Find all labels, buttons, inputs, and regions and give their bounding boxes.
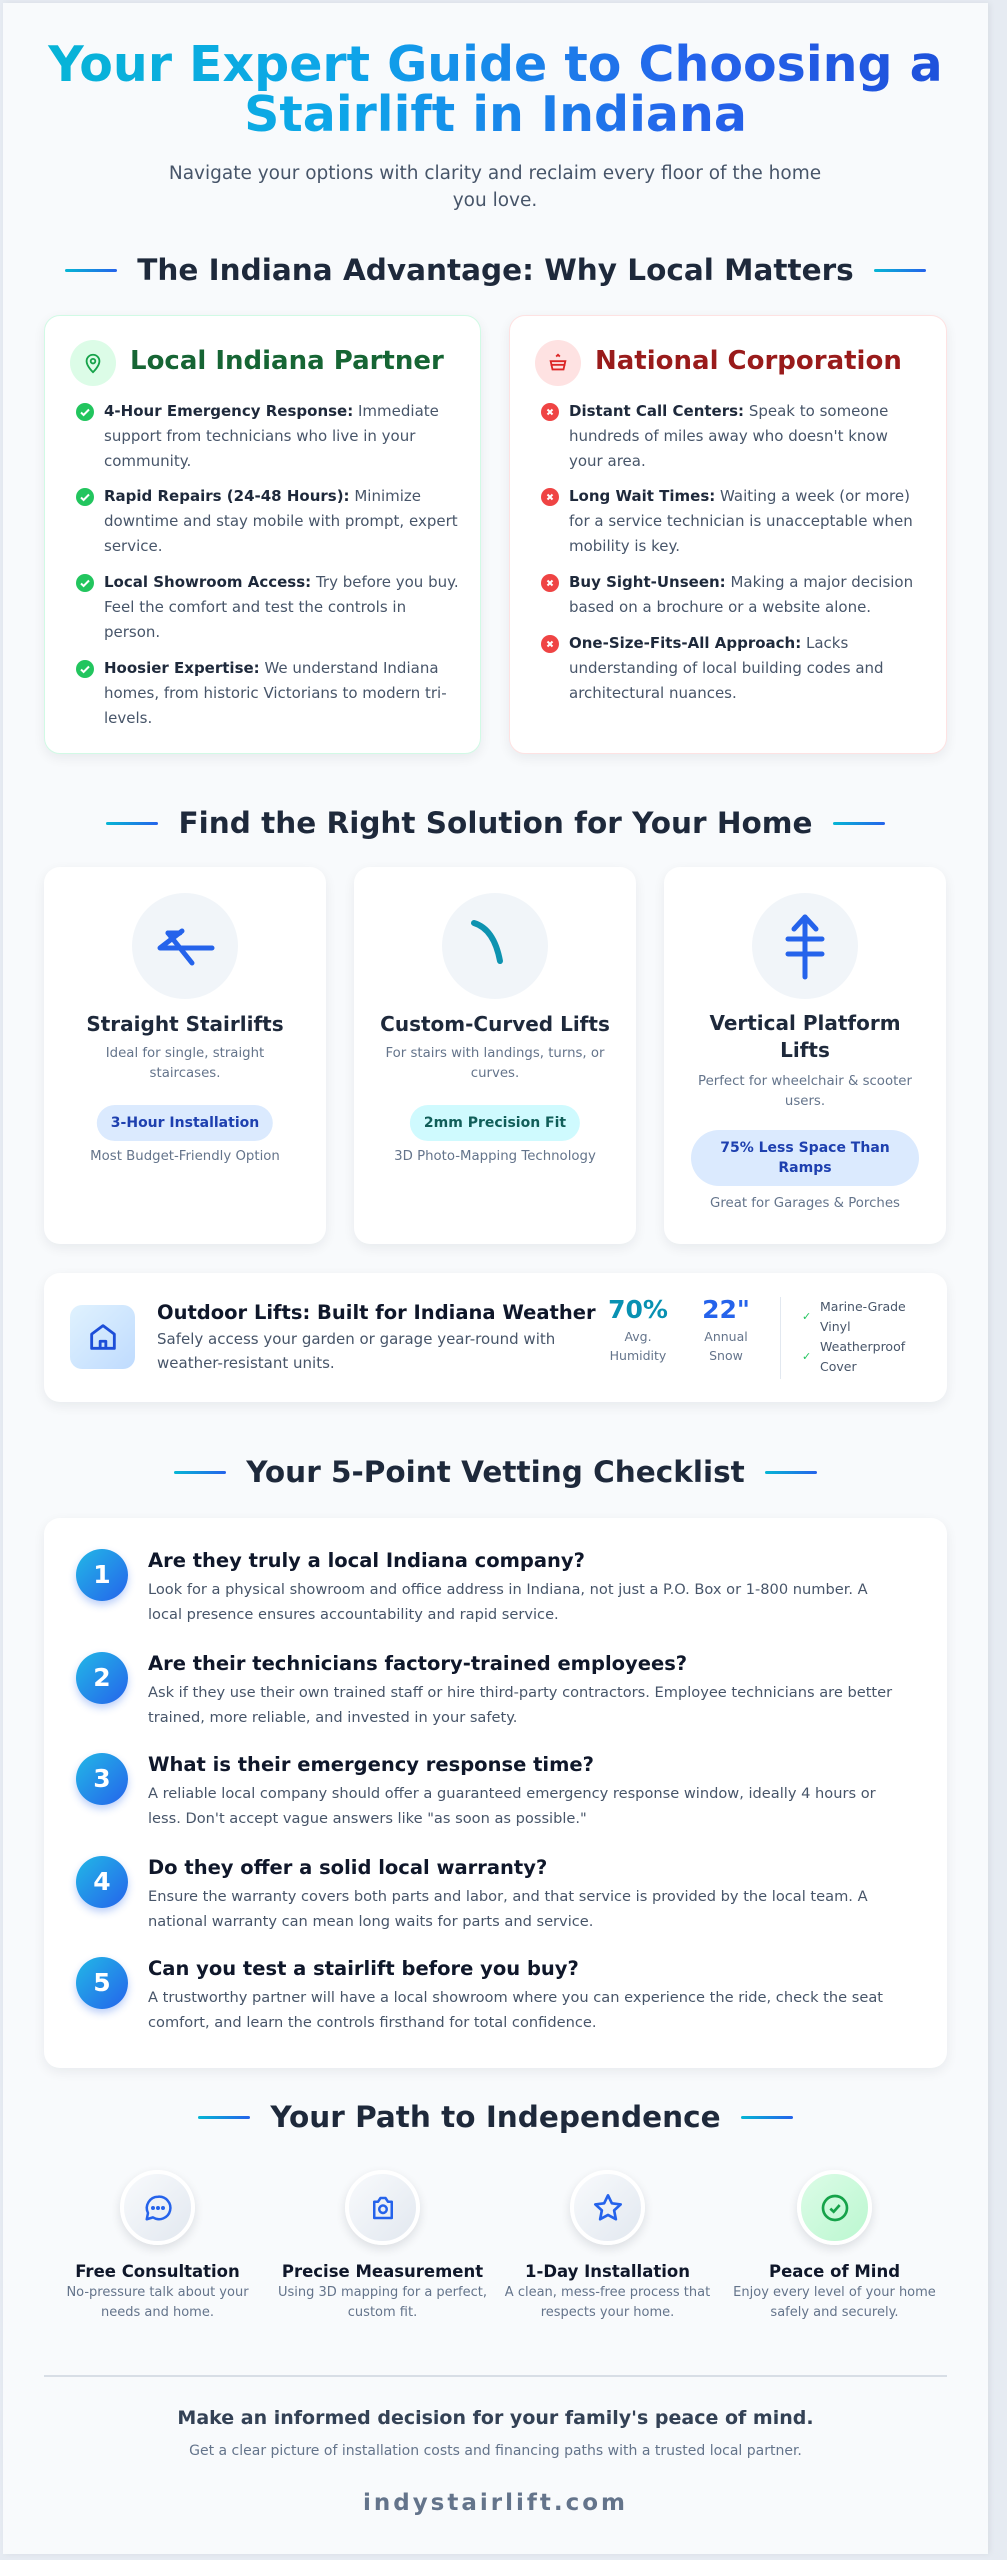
- step: peace of mind: [733, 2174, 936, 2320]
- text: Precise Measurement: [282, 2262, 483, 2281]
- panel: vertical platform: Great for Garages & Porches: [710, 1196, 900, 1211]
- text: Outdoor Lifts: Built for Indiana Weather: [157, 1301, 596, 1324]
- stat: snow: Annual: [704, 1329, 748, 1344]
- item: [76, 487, 458, 555]
- badge: 2mm Precision Fit: [424, 1115, 566, 1131]
- item: Long Wait Times: Waiting a week (or more) for a service technician is unacceptable when mobility is key.: [569, 487, 913, 555]
- item: Local Showroom Access: Try before you buy.: [104, 573, 459, 591]
- item: person.: [104, 623, 160, 641]
- title: Your Expert Guide to Choosing a: [48, 36, 943, 93]
- footer subtext: Get a clear picture of installation costs and financing paths with a trusted local partner.: [189, 2443, 802, 2459]
- panel: local partner: [44, 315, 481, 754]
- stat: snow: Snow: [709, 1348, 743, 1363]
- item: One-Size-Fits-All Approach: Lacks understanding of local building codes and architectural nuances.: [569, 634, 884, 702]
- panel: curved lifts: For stairs with landings, turns, or curves.: [386, 1046, 604, 1081]
- panel: vertical platform: Perfect for wheelchair & scooter users.: [698, 1074, 912, 1109]
- features list: [802, 1299, 906, 1374]
- panel: checklist: [44, 1518, 947, 2068]
- heading: path: Your Path to Independence: [270, 2100, 721, 2134]
- heading: checklist: Your 5-Point Vetting Checklist: [246, 1455, 745, 1489]
- item: Distant Call Centers: Speak to someone hundreds of miles away who doesn't know your area.: [569, 402, 888, 470]
- text: Using 3D mapping for a perfect, custom fit.: [278, 2285, 487, 2320]
- text: 1-Day Installation: [525, 2262, 690, 2281]
- badge: 3-Hour Installation: [111, 1115, 259, 1131]
- panel: national corporation: [509, 315, 947, 754]
- icon: vertical arrow: [752, 893, 858, 999]
- badge: [97, 1105, 273, 1141]
- stat: humidity: [608, 1295, 668, 1363]
- badge: [410, 1105, 580, 1141]
- panel: checklist: 5: [93, 1968, 111, 1997]
- step: installation: [504, 2177, 710, 2320]
- item: 4-Hour Emergency Response: Immediate: [104, 402, 439, 420]
- panel: checklist: Do they offer a solid local warranty?: [148, 1856, 547, 1879]
- icon: building: [535, 340, 581, 386]
- item 4: [72, 1856, 868, 1930]
- panel: vertical platform: [664, 867, 946, 1244]
- card title: National Corporation: [595, 346, 902, 376]
- item: downtime and stay mobile with prompt, expert: [104, 512, 458, 530]
- stat: snow: 22": [702, 1295, 750, 1324]
- panel: checklist: A trustworthy partner will have a local showroom where you can experience the ride, check the seat comfort, and learn the controls firsthand for total confidence.: [148, 1989, 883, 2031]
- item: Hoosier Expertise: We understand Indiana: [104, 659, 439, 677]
- text: A clean, mess-free process that respects your home.: [505, 2285, 710, 2320]
- stat: snow: [702, 1295, 750, 1363]
- text: Peace of Mind: [769, 2262, 900, 2281]
- item: homes, from historic Victorians to modern tri-: [104, 684, 447, 702]
- panel: straight stairlifts: Straight Stairlifts: [86, 1012, 284, 1036]
- panel: outdoor lifts: [44, 1273, 947, 1402]
- panel: straight stairlifts: Most Budget-Friendly Option: [90, 1149, 280, 1164]
- panel: checklist: Are they truly a local Indiana company?: [148, 1549, 585, 1572]
- features list: Marine-Grade: [820, 1299, 906, 1314]
- icon: camera: [345, 2170, 420, 2245]
- panel: straight stairlifts: [44, 867, 326, 1244]
- panel: curved lifts: Custom-Curved Lifts: [380, 1012, 610, 1036]
- panel: checklist: 3: [93, 1764, 111, 1793]
- panel: checklist: 4: [93, 1867, 111, 1896]
- item: Rapid Repairs (24-48 Hours): Minimize: [104, 487, 421, 505]
- item: Buy Sight-Unseen: Making a major decision based on a brochure or a website alone.: [569, 573, 913, 616]
- card title: Local Indiana Partner: [130, 346, 444, 376]
- panel: outdoor lifts: Safely access your garden or garage year-round with weather-resistant units.: [157, 1330, 555, 1372]
- item 1: [72, 1549, 868, 1623]
- features list: ✓: [802, 1350, 811, 1363]
- panel: checklist: Are their technicians factory-trained employees?: [148, 1652, 687, 1675]
- features list: Cover: [820, 1359, 857, 1374]
- footer url: indystairlift.com: [363, 2490, 628, 2516]
- heading: solutions: Find the Right Solution for Your Home: [178, 806, 813, 840]
- panel: curved lifts: [354, 867, 636, 1244]
- stat: humidity: Avg.: [624, 1329, 652, 1344]
- badge: [691, 1130, 919, 1186]
- item: support from technicians who live in your: [104, 427, 415, 445]
- text: Free Consultation: [75, 2262, 240, 2281]
- item 2: [72, 1652, 892, 1726]
- panel: checklist: What is their emergency response time?: [148, 1753, 594, 1776]
- panel: checklist: Ask if they use their own trained staff or hire third-party contractors. Employee technicians are better trained, more reliable, and invested in your safety.: [148, 1684, 892, 1726]
- stat: humidity: Humidity: [610, 1348, 666, 1363]
- item 3: [72, 1753, 876, 1827]
- panel: checklist: Ensure the warranty covers both parts and labor, and that service is provided by the local team. A national warranty can mean long waits for parts and service.: [148, 1888, 868, 1930]
- panel: vertical platform: Vertical Platform: [709, 1011, 901, 1035]
- subtitle: Navigate your options with clarity and reclaim every floor of the home you love.: [169, 163, 821, 211]
- text: No-pressure talk about your needs and home.: [66, 2285, 249, 2320]
- item: [76, 573, 459, 641]
- badge: 75% Less Space Than Ramps: [720, 1140, 890, 1176]
- item: levels.: [104, 709, 152, 727]
- item: [76, 659, 447, 727]
- icon: chat: [120, 2170, 195, 2245]
- item 5: [72, 1957, 883, 2031]
- icon: curve: [442, 893, 548, 999]
- item: [76, 402, 439, 470]
- panel: vertical platform: Lifts: [780, 1038, 830, 1062]
- icon: check circle: [797, 2170, 872, 2245]
- features list: ✓: [802, 1310, 811, 1323]
- item: service.: [104, 537, 162, 555]
- icon: location pin: [70, 340, 116, 386]
- step: consultation: [66, 2177, 249, 2320]
- icon: house: [70, 1305, 135, 1369]
- step: measurement: [278, 2177, 487, 2320]
- text: Enjoy every level of your home safely and securely.: [733, 2285, 936, 2320]
- panel: checklist: local presence ensures accountability and rapid service.: [148, 1606, 559, 1623]
- icon: star: [570, 2170, 645, 2245]
- title: Stairlift in Indiana: [244, 86, 747, 143]
- panel: checklist: Can you test a stairlift before you buy?: [148, 1957, 579, 1980]
- icon: straight stairlift: [132, 893, 238, 999]
- title: [3, 40, 988, 140]
- panel: checklist: 1: [93, 1560, 111, 1589]
- panel: checklist: A reliable local company should offer a guaranteed emergency response window, ideally 4 hours or less. Don't accept vague answers like "as soon as possible.": [148, 1785, 876, 1827]
- stat: humidity: 70%: [608, 1295, 668, 1324]
- features list: Weatherproof: [820, 1339, 905, 1354]
- panel: checklist: Look for a physical showroom and office address in Indiana, not just a P.O. Box or 1-800 number. A: [148, 1581, 868, 1598]
- item: community.: [104, 452, 191, 470]
- panel: curved lifts: 3D Photo-Mapping Technology: [394, 1149, 596, 1164]
- heading: Indiana Advantage: The Indiana Advantage: Why Local Matters: [137, 253, 854, 287]
- item: Feel the comfort and test the controls in: [104, 598, 406, 616]
- features list: Vinyl: [820, 1319, 851, 1334]
- panel: straight stairlifts: Ideal for single, straight staircases.: [106, 1046, 264, 1081]
- footer heading: Make an informed decision for your family's peace of mind.: [177, 2407, 814, 2429]
- panel: checklist: 2: [93, 1663, 111, 1692]
